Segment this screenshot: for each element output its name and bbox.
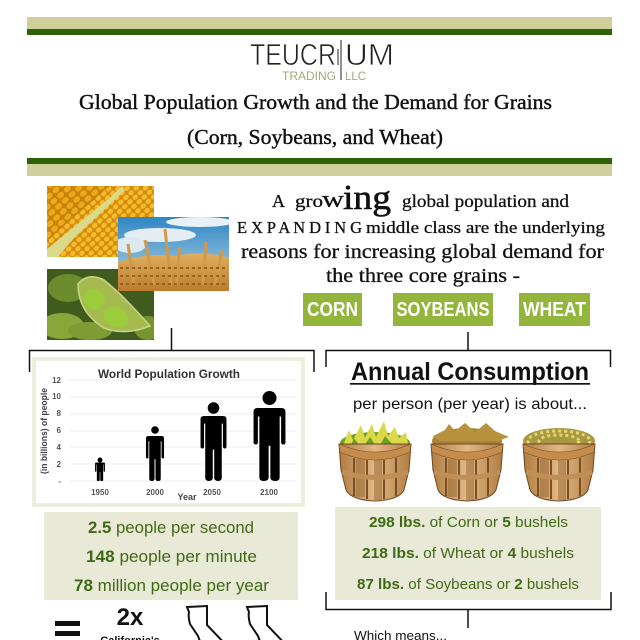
- stats: population growth: [44, 512, 298, 600]
- person icon: 1950: [95, 458, 105, 481]
- y axis labels: [52, 376, 62, 486]
- logo: Teucrium Trading LLC: [250, 37, 394, 83]
- label: corn: CORN: [307, 299, 358, 321]
- subheading: per person (per year) is about...: [353, 396, 587, 413]
- stats: grain consumption: 218 lbs. of Wheat or 4 bushels: [362, 545, 574, 562]
- intro text: the three core grains -: [326, 265, 520, 287]
- stats: grain consumption: 298 lbs. of Corn or 5 bushels: [369, 514, 568, 531]
- chart: world population growth: [34, 359, 303, 505]
- title: [79, 90, 552, 149]
- comparison: 2x California's population: 2x: [117, 604, 144, 631]
- stats: population growth: 78 million people per year: [74, 576, 269, 595]
- label: wheat: [519, 293, 590, 326]
- top banner stripes: [27, 17, 612, 35]
- label: corn: [303, 293, 362, 326]
- person icon: 2000: [146, 426, 164, 481]
- icon: California outline right: [247, 606, 293, 640]
- intro text: E X P A N D I N G: [237, 218, 362, 237]
- stats: grain consumption: [335, 507, 601, 600]
- stats: population growth: 2.5 people per second: [88, 518, 254, 537]
- x axis labels: 2050: [203, 488, 221, 497]
- equals sign: [55, 624, 80, 634]
- label: soybeans: [393, 293, 493, 326]
- chart title: World Population Growth: [98, 369, 240, 381]
- intro text: [237, 178, 606, 287]
- person icon: 2050: [201, 402, 226, 481]
- y axis labels: 2: [57, 460, 62, 469]
- logo: Teucrium Trading LLC: LLC: [345, 69, 366, 83]
- y axis labels: 12: [52, 376, 62, 385]
- logo: Teucrium Trading LLC: TRADING: [282, 69, 336, 83]
- heading: annual consumption: Annual Consumption: [351, 358, 589, 386]
- icon: wheat basket: [431, 423, 509, 501]
- y axis labels: -: [58, 477, 61, 486]
- icon: soybean basket: [523, 428, 595, 501]
- stats: population growth: 148 people per minute: [86, 547, 257, 566]
- stats: grain consumption: 87 lbs. of Soybeans or 2 bushels: [357, 576, 579, 593]
- label: soybeans: SOYBEANS: [396, 299, 490, 321]
- intro text: reasons for increasing global demand for: [241, 241, 604, 263]
- intro text: middle class are the underlying: [366, 218, 606, 237]
- person icon: 2100: [254, 391, 285, 481]
- x axis labels: [91, 488, 278, 497]
- right bracket bottom: [326, 592, 611, 628]
- title: (Corn, Soybeans, and Wheat): [187, 125, 443, 149]
- x axis labels: 2000: [146, 488, 164, 497]
- right bracket top: [326, 332, 610, 367]
- intro text: global population and: [402, 191, 569, 211]
- intro text: w: [322, 187, 345, 213]
- lower banner stripes: [27, 158, 612, 176]
- logo: Teucrium Trading LLC: UM: [345, 37, 394, 72]
- x axis labels: 2100: [260, 488, 278, 497]
- photo: corn: [47, 186, 154, 257]
- photo: wheat field: [114, 217, 234, 291]
- logo: Teucrium Trading LLC: TEUCR: [250, 37, 336, 72]
- x axis title: Year: [177, 492, 197, 502]
- y axis labels: 4: [57, 443, 62, 452]
- intro text: A: [272, 191, 285, 211]
- y axis title: (in billions) of people: [39, 388, 49, 474]
- left bracket: [30, 328, 314, 372]
- icon: California outline left: [187, 606, 233, 640]
- y axis labels: 8: [57, 409, 62, 418]
- title: Global Population Growth and the Demand for Grains: [79, 90, 552, 114]
- x axis labels: 1950: [91, 488, 109, 497]
- intro text: gro: [295, 191, 323, 211]
- label: wheat: WHEAT: [523, 299, 586, 321]
- y axis labels: 6: [57, 426, 62, 435]
- icon: corn basket: [339, 421, 411, 501]
- y axis labels: 10: [52, 392, 62, 401]
- intro text: ing: [343, 178, 391, 217]
- comparison: 2x California's population: [100, 604, 160, 640]
- photo: soybeans: [47, 269, 154, 340]
